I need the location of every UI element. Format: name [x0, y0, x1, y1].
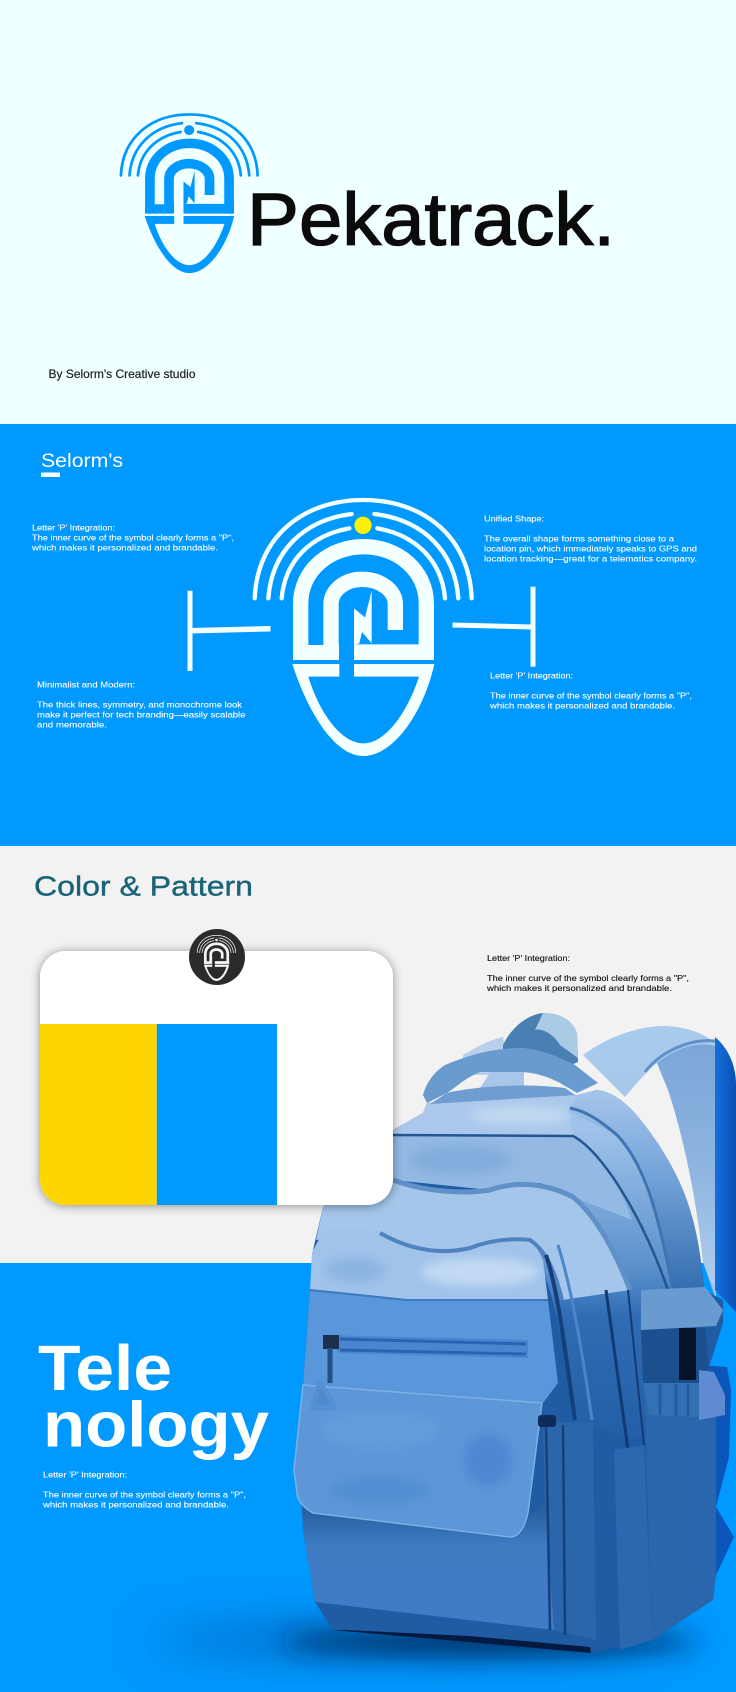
text block: letter P integration, bottom right: [489, 672, 692, 711]
backpack: middle pocket: [303, 1290, 558, 1403]
heading: Color & Pattern: Color & Pattern: [34, 870, 253, 902]
backpack: bottom edge: [333, 1630, 591, 1653]
text block: letter P integration, top left: [31, 524, 234, 553]
icon: Pekatrack emblem in blue: [121, 114, 258, 273]
backpack: front side pocket: [538, 1415, 596, 1640]
wordmark: Pekatrack.: Pekatrack.: [247, 178, 615, 261]
text block: letter P integration, top left: Letter 'P' Integration:: [32, 524, 115, 533]
text block: letter P integration, gray panel: [486, 954, 689, 993]
text block: unified shape: location tracking—great for a telematics company.: [484, 555, 697, 564]
heading: Tele nology: [38, 1332, 269, 1461]
leader line: left bracket: [188, 591, 270, 671]
text block: minimalist and modern: make it perfect for tech branding—easily scalable: [37, 711, 246, 720]
text block: unified shape: The overall shape forms something close to a: [484, 535, 675, 544]
icon: dark circular emblem badge: [189, 929, 245, 985]
text block: letter P integration, lower blue panel: Letter 'P' Integration:: [43, 1471, 127, 1480]
backpack: far shoulder strap: [583, 1026, 736, 1312]
text block: unified shape: [484, 515, 697, 564]
heading: Tele nology: Tele: [38, 1332, 172, 1404]
text block: minimalist and modern: [37, 681, 246, 730]
backpack: seams and zippers on upper body: [380, 1108, 672, 1450]
illustration: blue backpack: [294, 1013, 736, 1653]
text block: letter P integration, gray panel: Letter 'P' Integration:: [487, 954, 570, 963]
text block: letter P integration, top left: The inner curve of the symbol clearly forms a "P",: [32, 534, 234, 543]
heading: Tele nology: nology: [43, 1389, 269, 1461]
backpack: main body: [294, 1090, 723, 1653]
text block: letter P integration, top left: which makes it personalized and brandable.: [31, 544, 218, 553]
icon: large white emblem with yellow dot: [255, 500, 472, 756]
backpack: side panel with elastic pocket: [641, 1328, 725, 1640]
text block: minimalist and modern: The thick lines, symmetry, and monochrome look: [37, 701, 243, 710]
heading: Selorm's: Selorm's: [41, 451, 123, 472]
text block: letter P integration, gray panel: The inner curve of the symbol clearly forms a "P",: [487, 974, 689, 983]
backpack: zipper puller: [312, 1382, 335, 1408]
backpack: side dark strap: [700, 1365, 734, 1595]
backpack: front zipper: [323, 1335, 528, 1383]
swatch: blue: [157, 1024, 277, 1205]
text block: minimalist and modern: and memorable.: [37, 721, 107, 730]
text block: unified shape: location pin, which immediately speaks to GPS and: [484, 545, 697, 554]
text block: letter P integration, lower blue panel: [42, 1471, 246, 1510]
backpack: side column pocket: [614, 1445, 652, 1650]
text block: letter P integration, bottom right: Letter 'P' Integration:: [490, 672, 573, 681]
section: logo anatomy background: [0, 424, 736, 846]
credit line: By Selorm's Creative studio: [48, 367, 196, 381]
text block: letter P integration, gray panel: which makes it personalized and brandable.: [486, 984, 672, 993]
backpack: flap: [294, 1385, 542, 1537]
section: logo header background: [0, 0, 736, 424]
backpack: shoulder buckle: [641, 1287, 723, 1330]
text block: letter P integration, bottom right: which makes it personalized and brandable.: [489, 702, 675, 711]
backpack: top tab: [463, 1013, 578, 1075]
section: color and pattern background: [0, 846, 736, 1263]
text block: unified shape: Unified Shape:: [484, 515, 544, 524]
panel: color swatch card: [40, 951, 393, 1205]
text block: letter P integration, lower blue panel: The inner curve of the symbol clearly forms a "P",: [43, 1491, 246, 1500]
backpack: seam highlight above middle pocket: [310, 1290, 548, 1300]
backpack: handle: [423, 1048, 598, 1104]
backpack: lower front panel: [302, 1500, 554, 1630]
swatch: yellow: [40, 1024, 157, 1205]
leader line: right bracket: [452, 587, 536, 667]
shadow under backpack: [150, 1626, 700, 1654]
text block: letter P integration, lower blue panel: which makes it personalized and brandable.: [42, 1501, 229, 1510]
section: technology background: [0, 1263, 736, 1692]
text block: minimalist and modern: Minimalist and Modern:: [37, 681, 135, 690]
text block: letter P integration, bottom right: The inner curve of the symbol clearly forms a "P",: [490, 692, 692, 701]
